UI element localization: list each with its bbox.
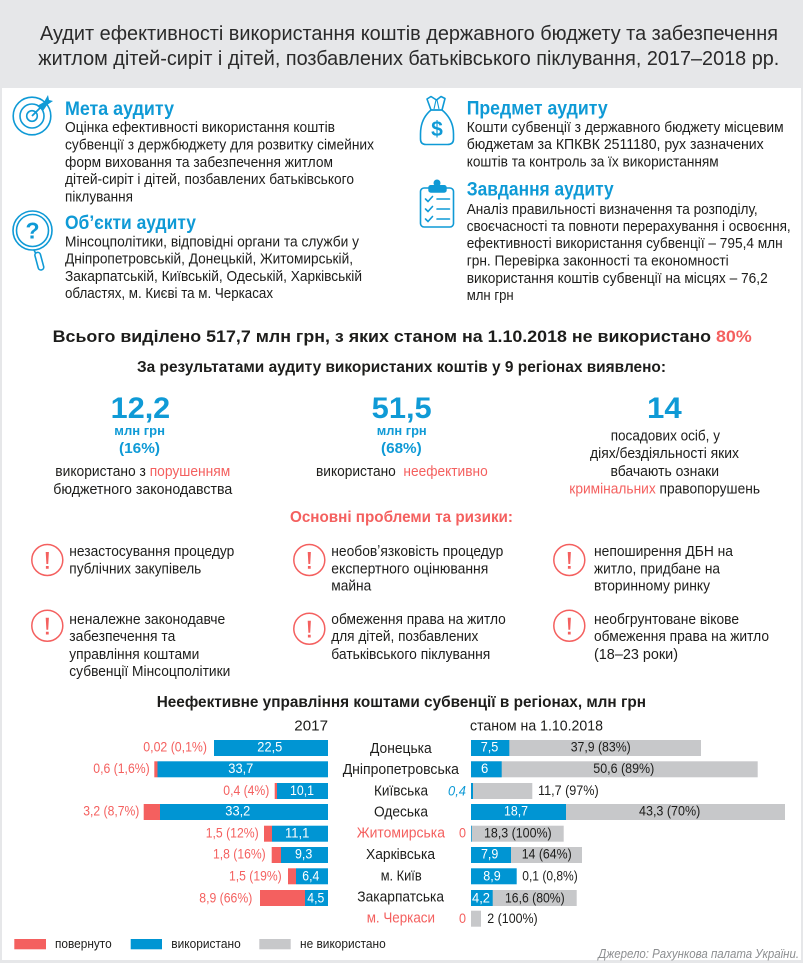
risk: housing rights: батьківського піклування xyxy=(331,647,490,663)
bar chart: 1.10.2018: 37,9 (83%) xyxy=(571,738,631,754)
title xyxy=(38,22,779,70)
stat: 12,2 million: 12,2 xyxy=(111,392,170,425)
bar chart: 1.10.2018: станом на 1.10.2018 xyxy=(470,719,603,735)
icon: clipboard checklist xyxy=(420,180,454,227)
stat: 51,5 million: млн грн xyxy=(377,423,427,438)
risk: legislation: субвенції Мінсоцполітики xyxy=(69,664,230,680)
icon: warning xyxy=(554,610,585,641)
risk: age limit: необгрунтоване вікове xyxy=(594,612,739,628)
subheading: audit results: За результатами аудиту використаних коштів у 9 регіонах виявлено: xyxy=(137,359,666,376)
stat: 14 officials: посадових осіб, у xyxy=(611,429,721,445)
stat: 51,5 million: використано неефективно xyxy=(316,464,488,480)
bar chart: 2017: 0,6 (1,6%) xyxy=(93,760,150,776)
risk: expert assessment: експертного оцінювання xyxy=(331,561,488,577)
panel: предмет аудиту: бюджетам за КПКВК 2511180, рух зазначених xyxy=(467,137,764,153)
stat: 12,2 million: (16%) xyxy=(119,440,160,457)
icon: magnifier with question mark: ? xyxy=(25,218,40,244)
bar chart: 2017: 4,5 xyxy=(307,890,324,906)
icon: money bag: $ xyxy=(431,118,443,141)
bar chart: 1.10.2018: 4,2 xyxy=(472,890,490,906)
icon: warning xyxy=(32,544,63,576)
bar chart: 1.10.2018: 7,5 xyxy=(481,738,498,754)
stat: 14 officials xyxy=(569,392,760,498)
panel: завдання аудиту: млн грн xyxy=(467,288,514,304)
bar chart: 1.10.2018: 43,3 (70%) xyxy=(639,802,700,818)
title: житлом дітей-сиріт і дітей, позбавлених батьківського піклування, 2017–2018 рр. xyxy=(38,47,779,70)
panel: предмет аудиту: Предмет аудиту xyxy=(467,98,608,120)
panel: завдання аудиту: Завдання аудиту xyxy=(467,180,614,200)
stat: 12,2 million: млн грн xyxy=(114,423,165,438)
bar chart: 1.10.2018: 0 xyxy=(459,824,466,840)
bar chart: 1.10.2018: 18,7 xyxy=(504,802,528,818)
risk: age limit xyxy=(554,610,769,663)
bar chart: 2017: 2017 xyxy=(294,719,328,735)
panel: об'єкти аудиту: Закарпатській, Київській, Одеській, Харківській xyxy=(65,269,362,285)
panel: предмет аудиту xyxy=(420,96,784,170)
panel: завдання аудиту: використання коштів субвенції на місцях – 76,2 xyxy=(467,271,768,287)
region labels: м. Черкаси xyxy=(367,911,435,927)
risk: building norms: житло, придбане на xyxy=(594,561,721,577)
icon: magnifier with question mark xyxy=(13,211,52,271)
legend: повернуто xyxy=(55,936,112,951)
bar chart: 1.10.2018: 18,3 (100%) xyxy=(484,824,552,840)
icon: money bag xyxy=(420,96,454,144)
bar chart: 1.10.2018: 16,6 (80%) xyxy=(505,890,565,906)
region labels: Закарпатська xyxy=(357,890,445,906)
risk: age limit: (18–23 роки) xyxy=(594,647,678,663)
icon: warning xyxy=(294,613,325,644)
risk: expert assessment: необовʼязковість процедур xyxy=(331,544,503,560)
risk: building norms xyxy=(554,544,734,595)
panel: мета аудиту: Оцінка ефективності використання коштів xyxy=(65,120,335,136)
panel: мета аудиту: субвенції з держбюджету для розвитку сімейних xyxy=(65,138,375,154)
icon: warning xyxy=(294,544,325,576)
stat: 12,2 million xyxy=(53,392,233,498)
panel: мета аудиту: форм виховання та забезпечення житлом xyxy=(65,155,333,171)
panel: мета аудиту xyxy=(13,95,375,206)
bar chart: 2017: 9,3 xyxy=(295,846,312,862)
bar chart: 2017: 0,4 (4%) xyxy=(223,782,269,798)
icon: warning xyxy=(554,544,585,576)
bar chart: 1.10.2018: 0 xyxy=(459,910,466,926)
risk: procurement xyxy=(32,544,234,577)
panel: предмет аудиту: Кошти субвенції з державного бюджету місцевим xyxy=(467,120,784,136)
panel: завдання аудиту: ефективності використання субвенції – 795,4 млн xyxy=(467,236,783,252)
stat: 12,2 million: використано з порушенням xyxy=(55,464,230,480)
bar chart: 2017: 1,5 (19%) xyxy=(229,868,282,884)
panel: завдання аудиту: Аналіз правильності визначення та розподілу, xyxy=(467,202,758,218)
legend: використано xyxy=(171,936,241,951)
bar chart: 2017: 8,9 (66%) xyxy=(199,890,252,906)
heading: problems and risks: Основні проблеми та ризики: xyxy=(290,509,513,526)
stat: 51,5 million: 51,5 xyxy=(372,392,432,425)
risk: procurement: незастосування процедур xyxy=(69,544,234,560)
bar chart: 1.10.2018: 8,9 xyxy=(483,868,501,884)
bar chart: 1.10.2018: 0,4 xyxy=(448,783,466,799)
risk: legislation xyxy=(32,610,230,680)
bar chart: 2017: 6,4 xyxy=(302,868,319,884)
panel: предмет аудиту: коштів та контроль за їх використанням xyxy=(467,154,719,170)
bar chart: 1.10.2018 xyxy=(448,719,785,927)
legend xyxy=(14,936,386,951)
bar chart: 2017: 1,5 (12%) xyxy=(206,824,259,840)
risk: legislation: забезпечення та xyxy=(69,629,176,645)
stat: 14 officials: вбачають ознаки xyxy=(610,464,719,480)
bar chart: 2017: 33,2 xyxy=(225,802,250,818)
bar chart: 2017: 11,1 xyxy=(285,824,309,840)
risk: age limit: обмеження права на житло xyxy=(594,629,769,645)
panel: об'єкти аудиту: областях, м. Києві та м. Черкасах xyxy=(65,286,274,302)
icon: warning xyxy=(32,610,63,641)
risk: building norms: вторинному ринку xyxy=(594,579,711,595)
risk: procurement: публічних закупівель xyxy=(69,561,202,577)
bar chart: 2017: 33,7 xyxy=(228,760,253,776)
legend: не використано xyxy=(300,936,386,951)
panel: завдання аудиту: грн. Перевірка законності та економності xyxy=(467,254,729,270)
headline: total allocated: Всього виділено 517,7 млн грн, з яких станом на 1.10.2018 не використано 80% xyxy=(53,327,752,346)
bar chart: 2017: 22,5 xyxy=(257,738,282,754)
bar chart: 1.10.2018: 7,9 xyxy=(481,846,498,862)
region labels: м. Київ xyxy=(381,869,422,885)
panel: об'єкти аудиту: Дніпропетровській, Донецькій, Житомирській, xyxy=(65,252,353,268)
panel: мета аудиту: дітей-сиріт і дітей, позбавлених батьківського xyxy=(65,172,354,188)
stat: 12,2 million: бюджетного законодавства xyxy=(53,482,233,498)
region labels: Житомирська xyxy=(357,826,446,842)
region labels: Донецька xyxy=(370,741,432,757)
bar chart: 2017: 0,02 (0,1%) xyxy=(143,738,207,754)
bar chart: 1.10.2018: 2 (100%) xyxy=(487,910,538,926)
title: Аудит ефективності використання коштів державного бюджету та забезпечення xyxy=(40,22,778,45)
risk: expert assessment: майна xyxy=(331,579,372,595)
panel: об'єкти аудиту: Мінсоцполітики, відповідні органи та служби у xyxy=(65,234,360,250)
region labels: Одеська xyxy=(374,805,429,821)
region labels: Київська xyxy=(374,784,429,800)
stat: 14 officials: кримінальних правопорушень xyxy=(569,482,760,498)
panel: мета аудиту: Мета аудиту xyxy=(65,99,174,120)
bar chart: 1.10.2018: 14 (64%) xyxy=(522,846,572,862)
bar chart: 2017: 1,8 (16%) xyxy=(213,846,266,862)
stat: 51,5 million xyxy=(316,392,488,480)
bar chart: 1.10.2018: 50,6 (89%) xyxy=(593,760,654,776)
panel: об'єкти аудиту xyxy=(13,211,362,302)
chart title: Неефективне управління коштами субвенції в регіонах, млн грн xyxy=(157,694,646,711)
region labels: Дніпропетровська xyxy=(343,762,460,778)
risk: housing rights: для дітей, позбавлених xyxy=(331,629,479,645)
risk: legislation: управління коштами xyxy=(69,647,199,663)
bar chart: 1.10.2018: 0,1 (0,8%) xyxy=(522,868,578,884)
bar chart: 2017: 3,2 (8,7%) xyxy=(83,802,139,818)
risk: legislation: неналежне законодавче xyxy=(69,612,225,628)
risk: housing rights xyxy=(294,612,506,663)
bar chart: 1.10.2018: 11,7 (97%) xyxy=(538,782,599,798)
icon: target xyxy=(13,95,53,135)
bar chart: 2017: 10,1 xyxy=(290,782,314,798)
bar chart: 1.10.2018: 6 xyxy=(481,760,488,776)
region labels: Харківська xyxy=(366,847,436,863)
panel: об'єкти аудиту: Обʼєкти аудиту xyxy=(65,213,196,234)
stat: 51,5 million: (68%) xyxy=(381,440,422,457)
risk: building norms: непоширення ДБН на xyxy=(594,544,734,560)
stat: 14 officials: 14 xyxy=(647,392,682,425)
risk: housing rights: обмеження права на житло xyxy=(331,612,506,628)
region labels xyxy=(343,741,460,927)
panel: мета аудиту: піклування xyxy=(65,190,133,206)
risk: expert assessment xyxy=(294,544,503,595)
bar chart: 2017 xyxy=(83,719,328,906)
stat: 14 officials: діях/бездіяльності яких xyxy=(590,446,740,462)
panel: завдання аудиту xyxy=(420,180,791,304)
